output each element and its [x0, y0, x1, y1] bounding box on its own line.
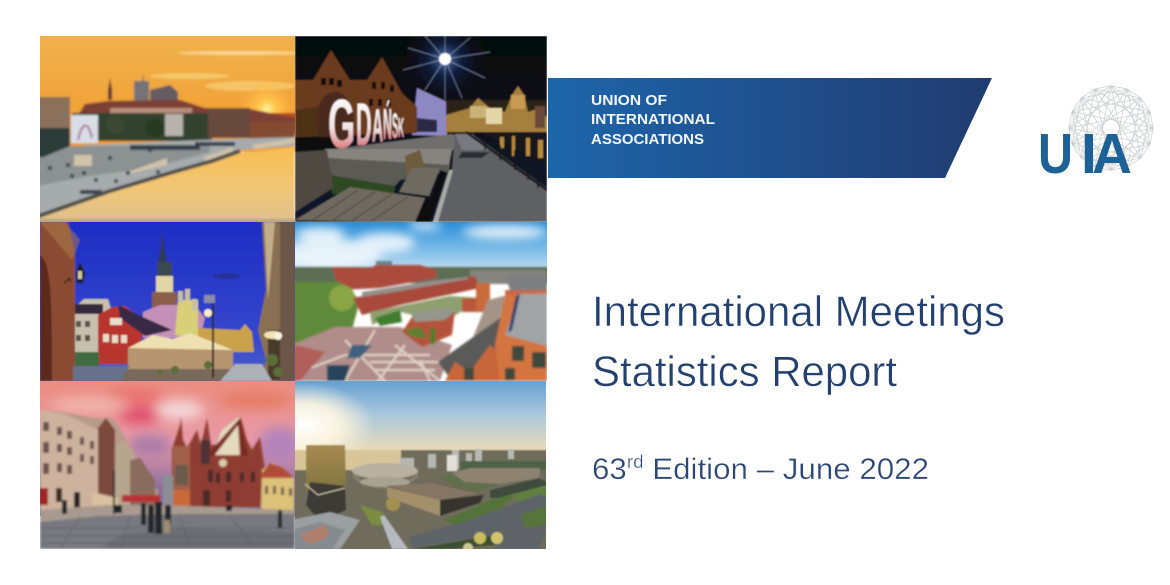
subtitle: edition and date: 63 — [592, 453, 625, 486]
photo: Katowice Spodek and cultural zone, aerial — [295, 381, 546, 549]
photo: Gdansk waterfront at night: G — [328, 85, 355, 163]
subtitle: edition and date: Edition – June 2022 — [644, 453, 929, 486]
photo: Gdansk waterfront at night: Ń — [383, 98, 392, 149]
panel: photo collage — [40, 36, 547, 549]
banner: Union of International Associations — [548, 78, 992, 178]
photo: Wroclaw town hall under pink sky — [40, 381, 295, 549]
banner: Union of International Associations: UNION OF — [591, 93, 667, 109]
photo: Gdansk waterfront at night: D — [356, 90, 372, 158]
title: report name: International Meetings — [592, 288, 1005, 336]
photo: Gdansk waterfront at night — [295, 36, 547, 222]
icon: UIA logo with geodesic sphere: A — [1092, 121, 1132, 185]
photo: Gdansk waterfront at night: S — [392, 108, 398, 146]
photo: Warsaw riverside at sunset — [40, 36, 295, 222]
photo: Gdansk waterfront at night: A — [372, 100, 383, 153]
banner: Union of International Associations: ASSOCIATIONS — [591, 132, 704, 148]
title: report name: Statistics Report — [592, 348, 897, 396]
photo: Poznan old market square at dusk — [40, 222, 295, 381]
subtitle: edition and date: rd — [627, 452, 644, 472]
banner: Union of International Associations: INTERNATIONAL — [591, 112, 715, 128]
icon: UIA logo with geodesic sphere — [1038, 85, 1154, 185]
icon: UIA logo with geodesic sphere: I — [1081, 122, 1097, 185]
title: report name — [592, 288, 1005, 396]
icon: UIA logo with geodesic sphere: U — [1038, 122, 1073, 185]
photo: Gdansk waterfront at night: K — [398, 113, 404, 144]
photo: Lodz brick factory complex, aerial — [295, 222, 547, 381]
